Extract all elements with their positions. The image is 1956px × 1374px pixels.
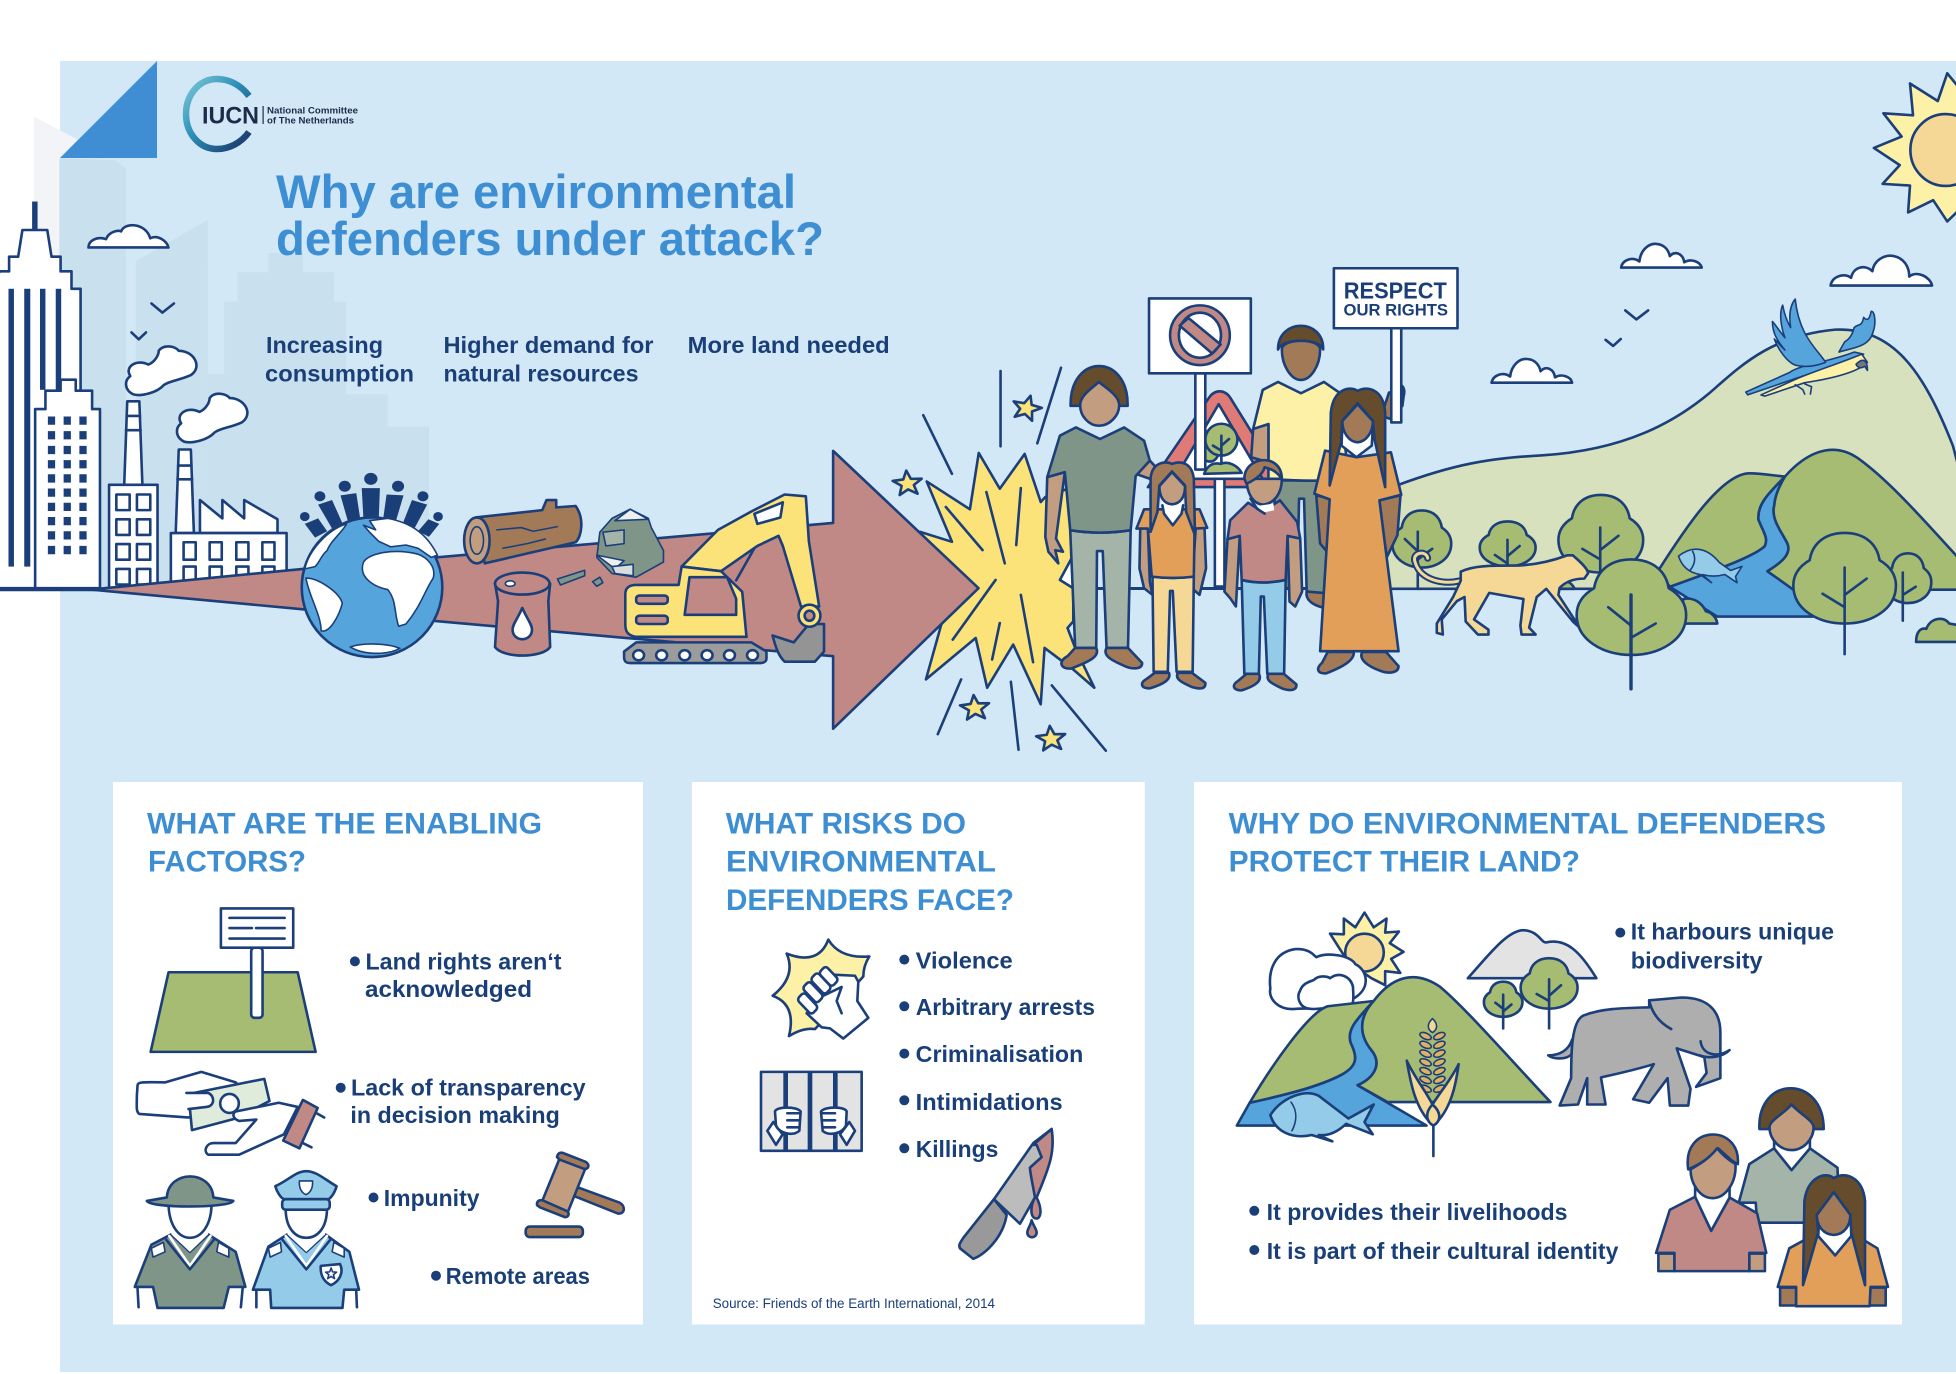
hill xyxy=(1383,330,1956,589)
icon: community people xyxy=(1656,1088,1888,1306)
bullet list: acknowledged xyxy=(365,976,532,1002)
heading: WHY DO ENVIRONMENTAL DEFENDERS xyxy=(1229,807,1826,840)
heading: PROTECT THEIR LAND? xyxy=(1229,846,1580,879)
icon: rocks xyxy=(557,509,663,586)
sign: prohibition xyxy=(1149,298,1251,470)
label: increasing consumption: Increasing xyxy=(266,332,383,358)
sign text: respect our rights: OUR RIGHTS xyxy=(1344,300,1448,319)
bullet list: It harbours unique xyxy=(1631,919,1834,945)
logo: IUCN: IUCN xyxy=(202,102,259,130)
bullet list: Impunity xyxy=(384,1185,480,1211)
office building xyxy=(35,380,100,588)
birds xyxy=(1606,310,1648,346)
icon: excavator xyxy=(624,495,824,663)
title: defenders under attack? xyxy=(276,212,824,265)
icon: sun and clouds xyxy=(1270,913,1404,1013)
heading xyxy=(1229,807,1826,879)
icon: hands exchanging money xyxy=(137,1072,324,1155)
icon: distant mountain and trees xyxy=(1468,930,1596,1028)
person: boy xyxy=(1224,460,1302,690)
icons xyxy=(1237,913,1888,1306)
icon: gavel xyxy=(526,1153,624,1237)
icon: oil barrel xyxy=(495,573,550,656)
icon: fish xyxy=(1679,549,1742,583)
bullet list: Killings xyxy=(916,1136,998,1162)
logo: IUCN xyxy=(186,79,358,149)
heading: DEFENDERS FACE? xyxy=(726,884,1014,917)
front trees xyxy=(1577,533,1931,689)
folded corner xyxy=(60,61,157,158)
bullet list xyxy=(336,948,590,1289)
title xyxy=(276,165,824,265)
clouds xyxy=(1492,244,1932,383)
bullet list: It provides their livelihoods xyxy=(1267,1199,1568,1225)
person: man in green shirt xyxy=(1045,366,1157,669)
logo: IUCN: of The Netherlands xyxy=(267,116,354,126)
label: higher demand: natural resources xyxy=(444,360,638,386)
icon: police officer xyxy=(253,1171,359,1308)
icon: mountains and river xyxy=(1237,977,1550,1126)
icon: bloody knife xyxy=(959,1129,1053,1259)
white fragment xyxy=(1060,558,1075,590)
ground line left xyxy=(0,588,97,591)
icon: soldier xyxy=(135,1176,245,1308)
left scene illustration xyxy=(0,202,979,729)
person: back man xyxy=(1251,326,1404,608)
title: Why are environmental xyxy=(276,165,796,218)
bullet list: It is part of their cultural identity xyxy=(1267,1238,1619,1264)
heading: WHAT RISKS DO xyxy=(726,807,966,840)
skyscraper xyxy=(0,202,81,588)
cloud xyxy=(88,225,168,247)
bullet list: biodiversity xyxy=(1631,948,1763,974)
person: woman in orange dress xyxy=(1314,389,1401,673)
person: girl xyxy=(1136,462,1207,688)
heading: WHAT ARE THE ENABLING xyxy=(147,807,542,840)
trees xyxy=(1392,495,1643,589)
heading xyxy=(147,807,542,879)
panel: risks xyxy=(692,782,1145,1324)
heading: ENVIRONMENTAL xyxy=(726,846,996,879)
sign text: respect our rights xyxy=(1344,277,1448,319)
logo: IUCN: National Committee xyxy=(267,105,358,116)
arrow xyxy=(91,451,979,729)
bullet list: Land rights aren‘t xyxy=(366,948,562,974)
icon: cougar xyxy=(1415,553,1588,635)
icon: wheat xyxy=(1407,1019,1459,1156)
bullet list xyxy=(1249,919,1834,1264)
icon: people on globe xyxy=(300,473,443,657)
label: higher demand: Higher demand for xyxy=(444,332,654,358)
sign text: respect our rights: RESPECT xyxy=(1344,277,1447,303)
bullet list: Lack of transparency xyxy=(351,1075,586,1101)
bullet list xyxy=(899,947,1095,1162)
explosion and people illustration xyxy=(892,268,1457,751)
factory right xyxy=(171,450,287,587)
bullet list: in decision making xyxy=(350,1102,560,1128)
mounds xyxy=(1560,582,1956,642)
icon: prison bars xyxy=(761,1072,862,1151)
background city silhouette xyxy=(34,117,429,590)
icon: elephant xyxy=(1548,997,1730,1106)
bullet list: Violence xyxy=(916,947,1013,973)
label: increasing consumption: consumption xyxy=(265,360,414,386)
icon: land with sign xyxy=(151,908,316,1052)
explosion xyxy=(920,453,1094,704)
icons xyxy=(135,908,624,1308)
icon: log xyxy=(464,500,581,563)
panel: why protect land xyxy=(1194,782,1902,1324)
heading: FACTORS? xyxy=(148,846,306,879)
stars xyxy=(892,392,1067,751)
bullet list: Criminalisation xyxy=(916,1041,1083,1067)
source: Source: Friends of the Earth International, 2014 xyxy=(713,1296,995,1311)
factory left xyxy=(109,401,158,588)
landscape illustration xyxy=(1383,73,1956,689)
smoke clouds xyxy=(126,346,247,442)
river and mountains xyxy=(1658,450,1956,617)
bullet list: Intimidations xyxy=(916,1089,1063,1115)
birds xyxy=(131,303,174,339)
panel: enabling factors xyxy=(113,782,643,1324)
sign: respect our rights board xyxy=(1334,268,1457,422)
road sign: triangle xyxy=(1148,391,1286,587)
label: more land: More land needed xyxy=(688,332,890,358)
icon: fist xyxy=(773,940,869,1039)
icon: sun xyxy=(1874,73,1956,221)
label: increasing consumption xyxy=(265,332,414,386)
burst lines xyxy=(923,368,1106,751)
bullet list: Arbitrary arrests xyxy=(916,994,1095,1020)
icon: parrot xyxy=(1746,299,1875,396)
ground line right xyxy=(1060,587,1956,590)
icons xyxy=(761,940,1053,1259)
icon: fish xyxy=(1270,1093,1374,1141)
heading xyxy=(726,807,1014,917)
bullet list: Remote areas xyxy=(446,1263,590,1289)
label: higher demand xyxy=(444,332,654,386)
